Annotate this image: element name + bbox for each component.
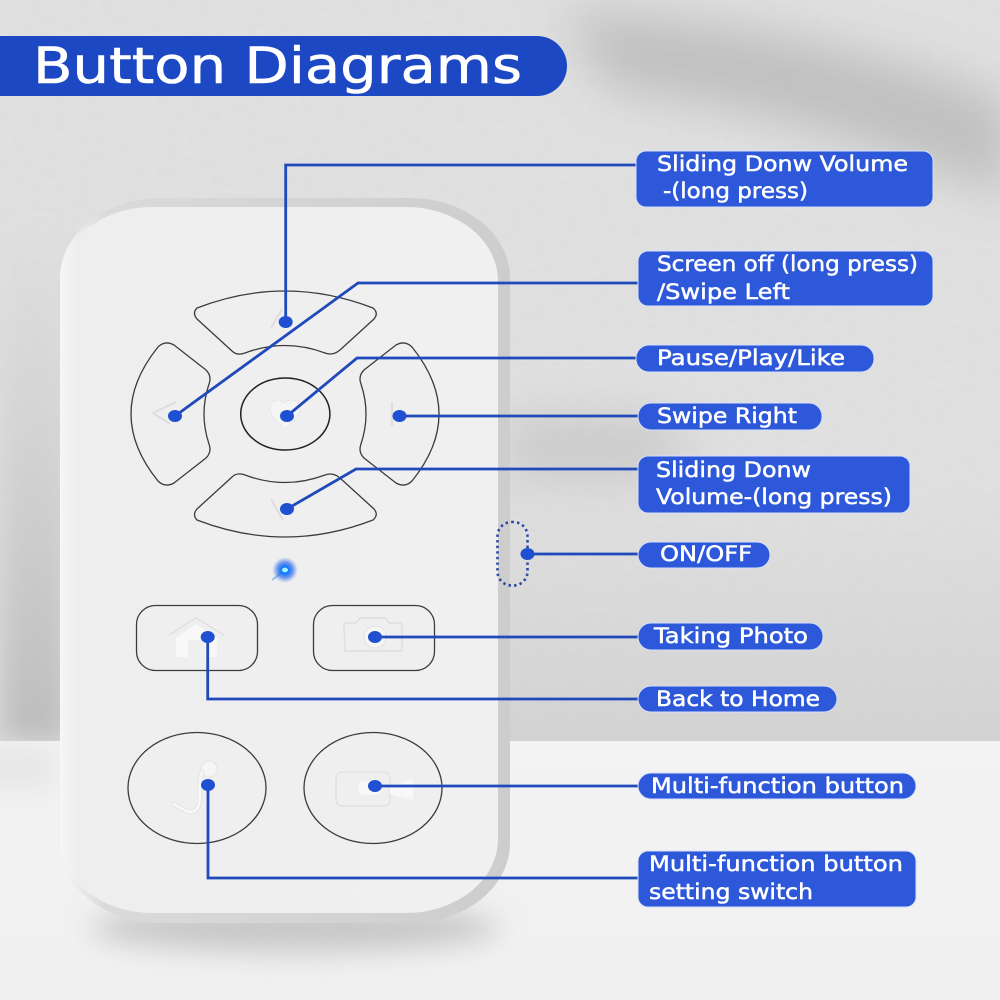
label: back to home: Back to Home [656,687,820,712]
label: screen off / swipe left: /Swipe Left [657,280,790,305]
multi-function setting button [128,732,266,844]
remote control body [60,198,510,952]
button: right [360,343,439,485]
label: screen off / swipe left: Screen off (long press) [657,252,918,277]
button: down [194,474,376,537]
icon: up chevron [271,309,282,328]
label: sliding down volume top [636,151,933,207]
title banner [0,36,567,96]
icon: heart [270,400,300,429]
label: screen off / swipe left [638,251,933,306]
label: multi-function setting switch: Multi-function button [649,852,903,877]
label: sliding down volume bottom: Volume-(long press) [656,485,892,510]
icon: camera [344,618,402,651]
icon: down chevron [271,499,283,520]
label: sliding down volume top: Sliding Donw Volume [657,152,908,177]
leader lines [175,165,640,878]
icon: right bar [391,402,393,426]
button: up [194,291,376,354]
label: sliding down volume top: -(long press) [663,179,808,204]
label: sliding down volume bottom: Sliding Donw [656,458,811,483]
icon: note hook [174,761,217,812]
label: multi-function button: Multi-function button [651,774,904,799]
anchor dots [168,316,534,792]
icon: video camera [336,772,413,806]
label: swipe right: Swipe Right [657,404,797,429]
label: sliding down volume bottom [638,456,910,513]
home button [136,606,258,670]
multi-function button [304,732,442,844]
direction pad buttons [131,291,439,537]
photo button [314,606,434,670]
label: pause play like [636,345,874,372]
label: multi-function setting switch: setting switch [649,880,813,905]
label: pause play like: Pause/Play/Like [657,346,845,371]
label: on off: ON/OFF [660,542,752,567]
button: center [241,378,330,450]
indicator light [272,557,298,583]
label: taking photo: Taking Photo [653,624,808,649]
title: Button Diagrams [33,37,522,95]
label: on off [638,542,770,568]
button: left [131,343,210,485]
label: multi-function setting switch [638,851,916,907]
icon: left chevron [153,402,176,424]
side switch marker [498,522,528,586]
label: swipe right [638,403,822,430]
icon: house [169,618,224,657]
label: taking photo [638,623,823,650]
